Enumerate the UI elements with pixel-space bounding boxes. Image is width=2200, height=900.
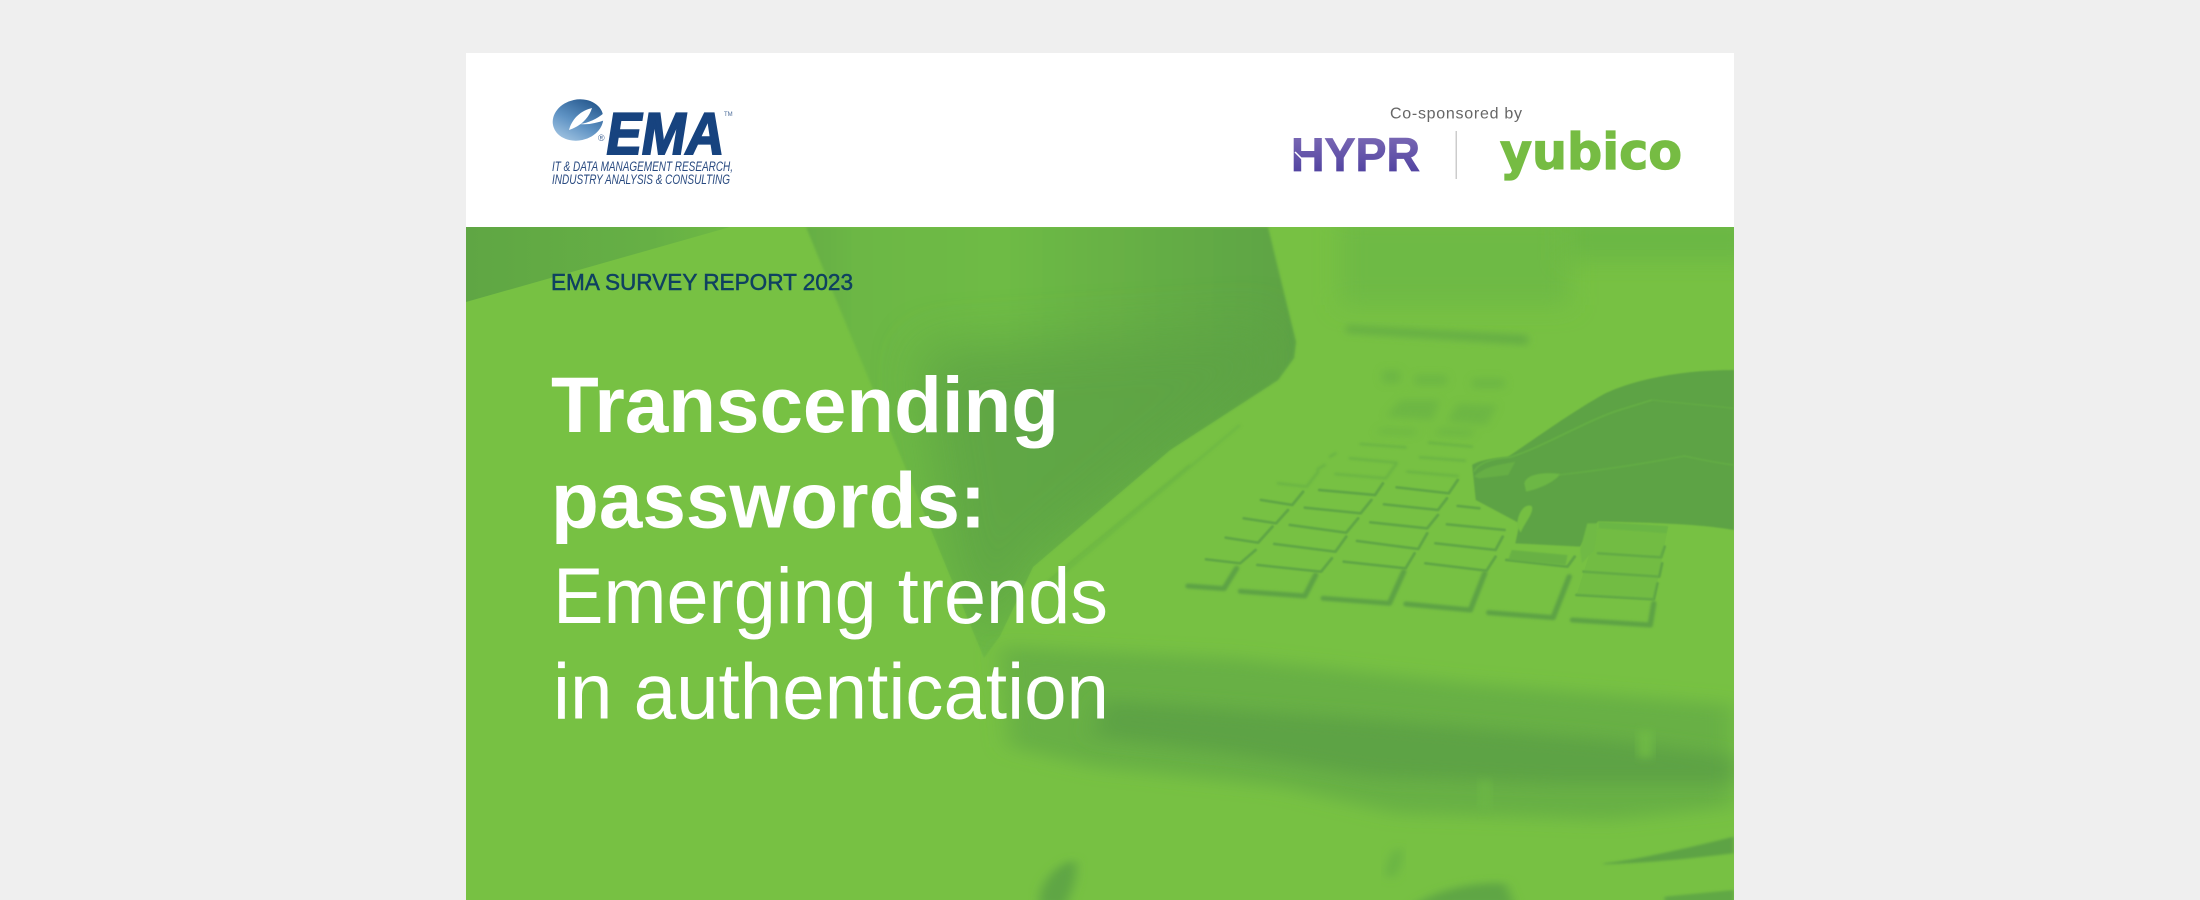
photo: upper key gaps: [1206, 480, 1665, 599]
title: passwords:: [551, 456, 986, 544]
report label: EMA SURVEY REPORT 2023: [551, 269, 853, 295]
title: Emerging trends: [553, 551, 1108, 640]
photo: desk wedge top left: [466, 227, 730, 302]
photo: keyboard: [1188, 370, 1734, 625]
photo: small highlights: [1638, 734, 1653, 758]
photo: laptop screen: [806, 227, 1296, 658]
photo: background top right: [1347, 227, 1734, 345]
sponsors block: Co-sponsored by: [1390, 106, 1522, 122]
report cover infographic: [466, 53, 1734, 900]
EMA logo: IT & DATA MANAGEMENT RESEARCH,: [552, 159, 733, 174]
EMA logo: ®: [598, 133, 605, 143]
photo: bottom blurred objects: [1040, 837, 1734, 900]
panel: header band: [466, 53, 1734, 227]
EMA logo: EMA: [602, 100, 730, 167]
sponsors block: yubico: [1500, 123, 1682, 181]
title: Transcending: [551, 360, 1059, 449]
EMA logo: INDUSTRY ANALYSIS & CONSULTING: [552, 172, 730, 187]
EMA logo: [549, 95, 733, 187]
panel: green hero with laptop photo: [466, 215, 1755, 900]
sponsors block: HYPR: [1291, 128, 1420, 181]
sponsors block: [1291, 106, 1682, 181]
title: [551, 360, 1109, 736]
photo: laptop front shadow: [1000, 647, 1734, 900]
photo: hand: [1472, 370, 1734, 565]
photo: key faces shading: [1576, 527, 1668, 600]
photo: faint far keys: [1386, 373, 1497, 422]
photo: bottom row keys: [1188, 568, 1654, 625]
EMA logo: TM: [724, 112, 733, 118]
title: in authentication: [553, 646, 1109, 736]
